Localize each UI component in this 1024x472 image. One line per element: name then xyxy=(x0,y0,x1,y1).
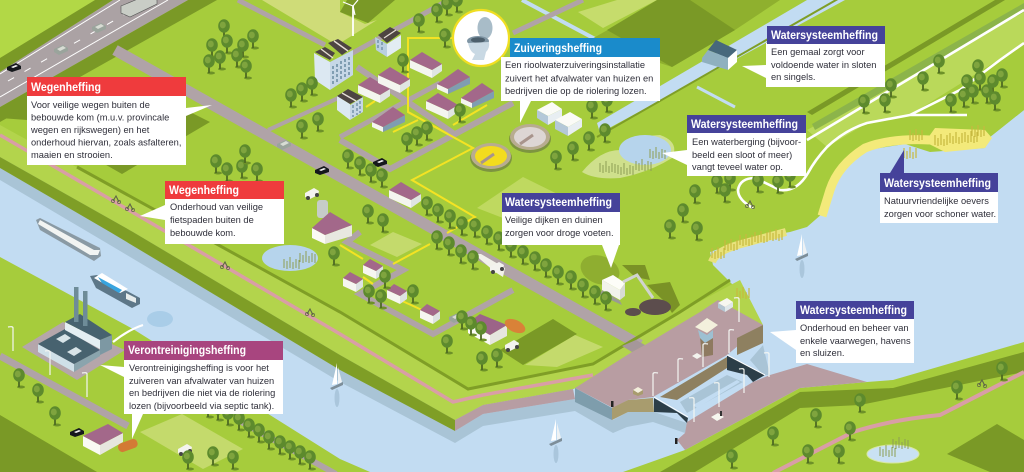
dike edge xyxy=(0,157,455,431)
callout: Wegenheffing roads: maaien en strooien. xyxy=(31,150,113,160)
callout: Watersysteemheffing water storage: Een waterberging (bijvoor- xyxy=(692,137,801,147)
callout: Wegenheffing cycle paths: Onderhoud van veilige xyxy=(170,202,263,212)
shore reeds xyxy=(712,125,984,299)
fields xyxy=(0,0,1024,367)
callout: Verontreinigingsheffing: lozen (bijvoorbeeld via septic tank). xyxy=(129,401,274,411)
callout: Wegenheffing roads: Wegenheffing xyxy=(31,82,101,94)
callout: Watersysteemheffing water storage xyxy=(662,115,806,176)
vehicles xyxy=(7,0,519,456)
farm house with tank xyxy=(468,314,528,345)
callout: Wegenheffing roads xyxy=(27,77,212,165)
farm with silo xyxy=(312,200,352,244)
factory xyxy=(8,287,173,397)
icon: small boxes and picnic bench xyxy=(611,353,724,444)
callout: Zuiveringsheffing: bedrijven die op de riolering lozen. xyxy=(505,86,647,96)
icon: control tower xyxy=(695,318,718,357)
callout: Verontreinigingsheffing: Verontreinigingsheffing is voor het xyxy=(129,363,269,373)
callout: Watersysteemheffing banks: Watersysteemheffing xyxy=(884,178,991,190)
callout: Verontreinigingsheffing: en bedrijven die niet via de riolering xyxy=(129,388,275,398)
lower-right land xyxy=(623,342,1024,472)
country house with tank xyxy=(83,424,139,455)
callout: Zuiveringsheffing: Zuiveringsheffing xyxy=(514,43,602,55)
callout: Watersysteemheffing water storage: beeld een sloot of meer) xyxy=(692,150,792,160)
buildings: apartments xyxy=(314,27,401,120)
callout: Watersysteemheffing locks: Watersysteemheffing xyxy=(800,305,907,317)
callout: Watersysteemheffing pumping station: Een gemaal zorgt voor xyxy=(771,47,865,57)
callout: Watersysteemheffing banks: Natuurvriendelijke oevers xyxy=(884,196,989,206)
callout: Verontreinigingsheffing xyxy=(100,341,283,439)
callout: Watersysteemheffing water storage: vangt teveel water op. xyxy=(692,162,783,172)
embankment xyxy=(455,389,575,431)
callout: Wegenheffing cycle paths: Wegenheffing xyxy=(169,185,239,197)
callout: Watersysteemheffing dikes: zorgen voor droge voeten. xyxy=(505,228,614,238)
road network xyxy=(115,0,640,345)
canal xyxy=(522,0,850,137)
lake shore paths and beach xyxy=(712,10,1024,262)
pumping station xyxy=(702,40,737,70)
inner dike line xyxy=(77,167,730,389)
callout: Verontreinigingsheffing: Verontreinigingsheffing xyxy=(128,345,246,357)
farm pond xyxy=(262,245,318,271)
cycle path xyxy=(0,135,593,402)
callout: Watersysteemheffing water storage: Watersysteemheffing xyxy=(691,119,798,131)
ship: white barge xyxy=(36,218,101,261)
reservoir marsh pond xyxy=(582,135,674,178)
callout: Watersysteemheffing locks xyxy=(770,301,914,363)
callout: Watersysteemheffing dikes: Veilige dijken en duinen xyxy=(505,215,603,225)
callout: Wegenheffing roads: bebouwde kom (m.u.v. provincale xyxy=(31,112,169,122)
treatment plant tanks xyxy=(470,102,582,172)
icon: white box on pier xyxy=(718,298,733,312)
buildings: row houses xyxy=(343,52,494,324)
water shadow along river bank xyxy=(0,168,687,443)
callout: Watersysteemheffing locks: en sluizen. xyxy=(800,348,844,358)
excavator and soil mounds xyxy=(576,250,680,316)
callout: Zuiveringsheffing xyxy=(501,38,660,123)
callout: Wegenheffing cycle paths xyxy=(140,181,284,244)
sailboats xyxy=(330,234,808,463)
callout: Zuiveringsheffing: zuivert het afvalwater van huizen en xyxy=(505,74,653,84)
wind turbine xyxy=(343,0,358,36)
highway xyxy=(0,0,217,122)
callout: Wegenheffing cycle paths: bebouwde kom. xyxy=(170,228,236,238)
callout: Watersysteemheffing dikes: Watersysteemheffing xyxy=(505,197,612,209)
callout: Watersysteemheffing locks: Onderhoud en beheer van xyxy=(800,323,909,333)
callout: Wegenheffing roads: wegen en rijkswegen) en het xyxy=(30,125,150,135)
sewer pipes xyxy=(340,38,487,310)
icon: toilet xyxy=(453,10,509,66)
callout: Wegenheffing cycle paths: fietspaden buiten de xyxy=(170,215,254,225)
callout: Zuiveringsheffing: Een rioolwaterzuiveringsinstallatie xyxy=(505,60,645,70)
callout: Wegenheffing roads: onderhoud hiervan, zoals asfalteren, xyxy=(31,138,181,148)
callout: Watersysteemheffing pumping station: Watersysteemheffing xyxy=(771,30,878,42)
callout: Watersysteemheffing pumping station xyxy=(742,26,885,87)
callout: Watersysteemheffing dikes xyxy=(502,193,620,268)
callout: Wegenheffing roads: Voor veilige wegen buiten de xyxy=(31,100,150,110)
ship: container vessel xyxy=(90,273,140,308)
lock complex xyxy=(575,298,867,450)
cyclists xyxy=(111,196,987,388)
callout: Watersysteemheffing pumping station: voldoende water in sloten xyxy=(771,60,876,70)
callout: Watersysteemheffing banks: zorgen voor schoner water. xyxy=(884,209,996,219)
callout: Watersysteemheffing pumping station: en singels. xyxy=(771,72,815,82)
callout: Watersysteemheffing banks xyxy=(880,150,998,223)
lower-left land xyxy=(0,257,370,472)
callout: Watersysteemheffing locks: enkele vaarwegen, havens xyxy=(800,336,911,346)
callout: Verontreinigingsheffing: zuiveren van afvalwater van huizen xyxy=(129,376,274,386)
lower right pond xyxy=(867,437,919,463)
